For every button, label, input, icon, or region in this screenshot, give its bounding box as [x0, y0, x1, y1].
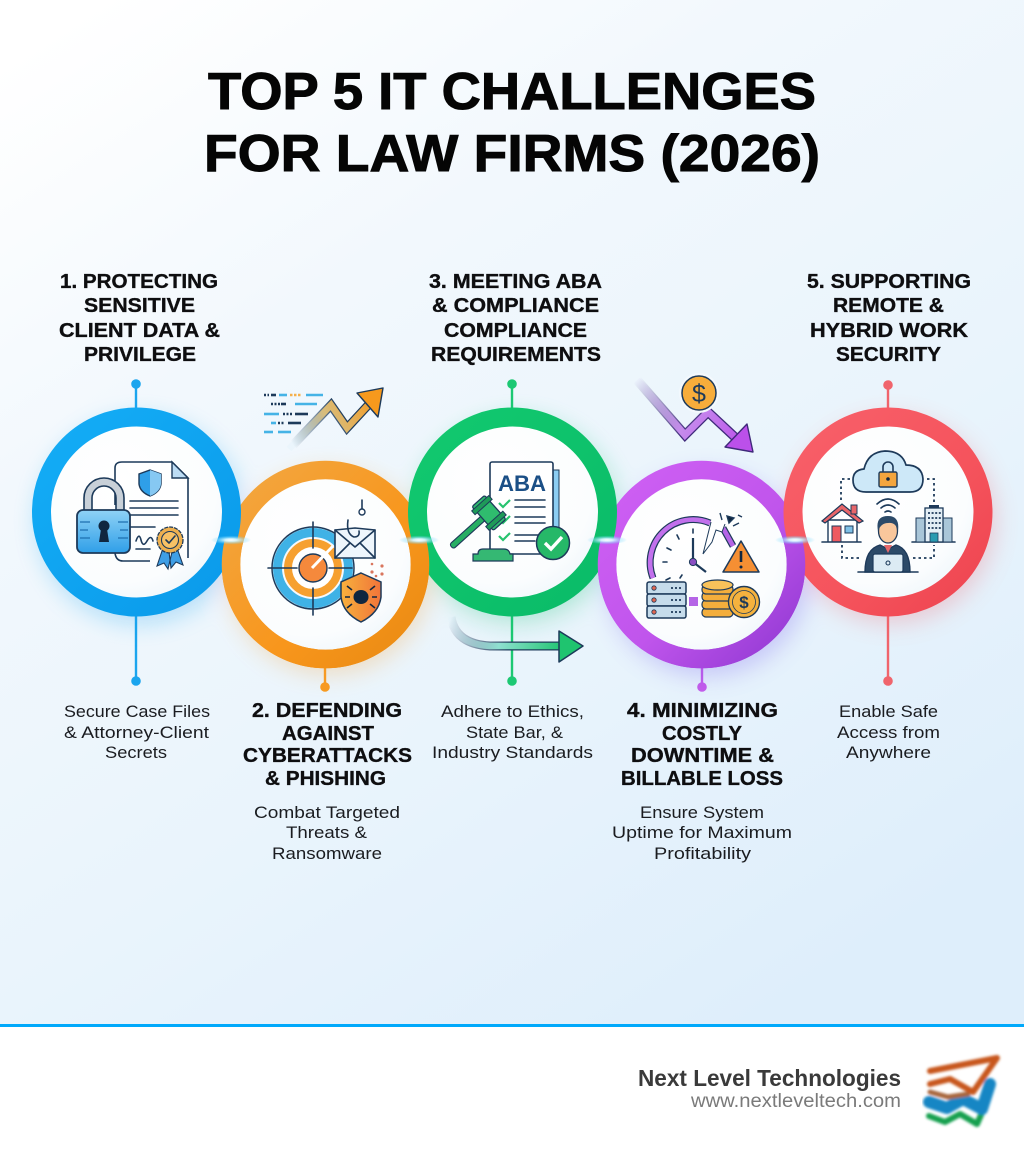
- arrow: falling purple with dollar coin: [637, 373, 753, 452]
- connector: challenge 3: [508, 380, 516, 685]
- description: challenge 4: Uptime for Maximum: [612, 823, 792, 842]
- heading: challenge 3: [429, 271, 602, 366]
- heading: challenge 2: AGAINST: [282, 723, 374, 745]
- interlocking ring chain: [37, 417, 995, 676]
- description: challenge 1: [64, 702, 210, 762]
- description: challenge 5: Anywhere: [846, 743, 931, 762]
- footer company name: www.nextleveltech.com: [690, 1090, 901, 1112]
- description: challenge 1: & Attorney-Client: [64, 723, 209, 742]
- icon: ABA document, gavel and check: ABA: [498, 471, 546, 496]
- heading: challenge 3: COMPLIANCE: [444, 320, 587, 342]
- description: challenge 3: Industry Standards: [432, 743, 593, 762]
- icon: remote worker, cloud lock, home and office: [822, 451, 955, 572]
- footer: [0, 1024, 1024, 1154]
- description: challenge 4: [612, 803, 792, 863]
- heading: challenge 4: DOWNTIME &: [631, 745, 774, 767]
- arrow: forward green: [451, 617, 583, 662]
- connector: challenge 1: [132, 380, 140, 685]
- title: TOP 5 IT CHALLENGES: [208, 63, 816, 121]
- connector: challenge 5: [884, 381, 892, 685]
- description: challenge 3: [432, 702, 593, 762]
- description: challenge 2: Combat Targeted: [254, 803, 400, 822]
- description: challenge 5: Enable Safe: [839, 702, 938, 721]
- arrow: falling purple with dollar coin: $: [692, 380, 706, 408]
- heading: challenge 4: 4. MINIMIZING: [627, 700, 778, 722]
- heading: challenge 3: REQUIREMENTS: [431, 344, 601, 366]
- description: challenge 4: Profitability: [654, 844, 752, 863]
- heading: challenge 1: PRIVILEGE: [84, 344, 196, 366]
- heading: challenge 2: [243, 700, 412, 790]
- ring 3: green: [418, 417, 608, 607]
- heading: challenge 5: SECURITY: [836, 344, 942, 366]
- description: challenge 2: Threats &: [286, 823, 368, 842]
- heading: challenge 2: & PHISHING: [265, 768, 386, 790]
- heading: challenge 3: 3. MEETING ABA: [429, 271, 602, 293]
- ring 2: orange: [231, 470, 420, 659]
- heading: challenge 1: SENSITIVE: [84, 295, 195, 317]
- icon: cracked clock, server, coins and warning: [647, 513, 760, 618]
- description: challenge 3: Adhere to Ethics,: [441, 702, 584, 721]
- title: FOR LAW FIRMS (2026): [204, 125, 820, 183]
- heading: challenge 4: [621, 700, 783, 790]
- description: challenge 2: Ransomware: [272, 844, 382, 863]
- heading: challenge 5: HYBRID WORK: [810, 320, 969, 342]
- description: challenge 5: [837, 702, 940, 762]
- footer company name: [638, 1065, 901, 1112]
- description: challenge 2: [254, 803, 400, 863]
- footer company name: Next Level Technologies: [638, 1065, 901, 1091]
- heading: challenge 4: COSTLY: [662, 723, 743, 745]
- heading: challenge 5: 5. SUPPORTING: [807, 271, 971, 293]
- heading: challenge 5: REMOTE &: [833, 295, 944, 317]
- heading: challenge 2: CYBERATTACKS: [243, 745, 412, 767]
- icon: ABA document, gavel and check: [441, 462, 570, 561]
- heading: challenge 3: & COMPLIANCE: [432, 295, 599, 317]
- arrow: rising orange with code lines: [264, 388, 383, 449]
- description: challenge 1: Secure Case Files: [64, 702, 210, 721]
- description: challenge 5: Access from: [837, 723, 940, 742]
- heading: challenge 2: 2. DEFENDING: [252, 700, 402, 722]
- connector: challenge 4: [698, 666, 706, 691]
- heading: challenge 1: CLIENT DATA &: [59, 320, 220, 342]
- ring 4: purple: [607, 470, 796, 659]
- heading: challenge 4: BILLABLE LOSS: [621, 768, 783, 790]
- footer logo: [929, 1058, 997, 1124]
- heading: challenge 1: [59, 271, 220, 366]
- ring 5: red: [793, 417, 983, 607]
- description: challenge 1: Secrets: [105, 743, 167, 762]
- description: challenge 4: Ensure System: [640, 803, 764, 822]
- connector: challenge 2: [321, 666, 329, 691]
- description: challenge 3: State Bar, &: [466, 723, 564, 742]
- heading: challenge 1: 1. PROTECTING: [60, 271, 218, 293]
- icon: cracked clock, server, coins and warning: $: [739, 593, 749, 612]
- title: [204, 63, 820, 183]
- heading: challenge 5: [807, 271, 971, 366]
- ring 1: blue: [42, 417, 232, 607]
- icon: target, phishing envelope and bug shield: [268, 500, 384, 622]
- icon: padlock and certified document: [77, 462, 188, 569]
